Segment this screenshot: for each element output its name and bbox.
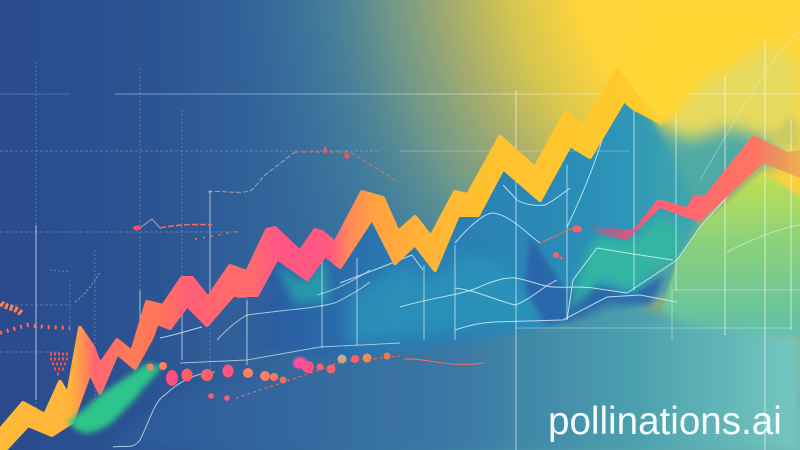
red scatter cluster — [50, 354, 70, 374]
area: deep blue mass under main line — [232, 85, 700, 360]
green smear near the start of the line — [72, 367, 157, 430]
area: green center slope — [567, 217, 683, 313]
area: teal ripple low on the left — [345, 255, 560, 345]
area: navy pocket in the center — [525, 235, 665, 325]
red blobs on dotted trails — [133, 146, 350, 230]
main rising ribbon — [0, 70, 660, 450]
area: teal shadow right of the main line — [632, 108, 785, 255]
red data dots — [146, 226, 582, 401]
area: floor of the chart — [110, 305, 800, 450]
area: teal glow beneath the pink peaks — [275, 258, 330, 305]
area chart layers — [110, 45, 800, 450]
area: lime slope on the right — [662, 172, 800, 335]
area: pale ridge below the yellow sky — [660, 45, 800, 170]
secondary red ribbon — [590, 135, 800, 240]
watermark: pollinations.ai: pollinations.ai — [548, 400, 782, 443]
area: olive wedge at the right edge — [766, 116, 800, 150]
red dotted trails — [0, 152, 573, 398]
yellow sky edge above the ribbon tail — [625, 0, 800, 124]
